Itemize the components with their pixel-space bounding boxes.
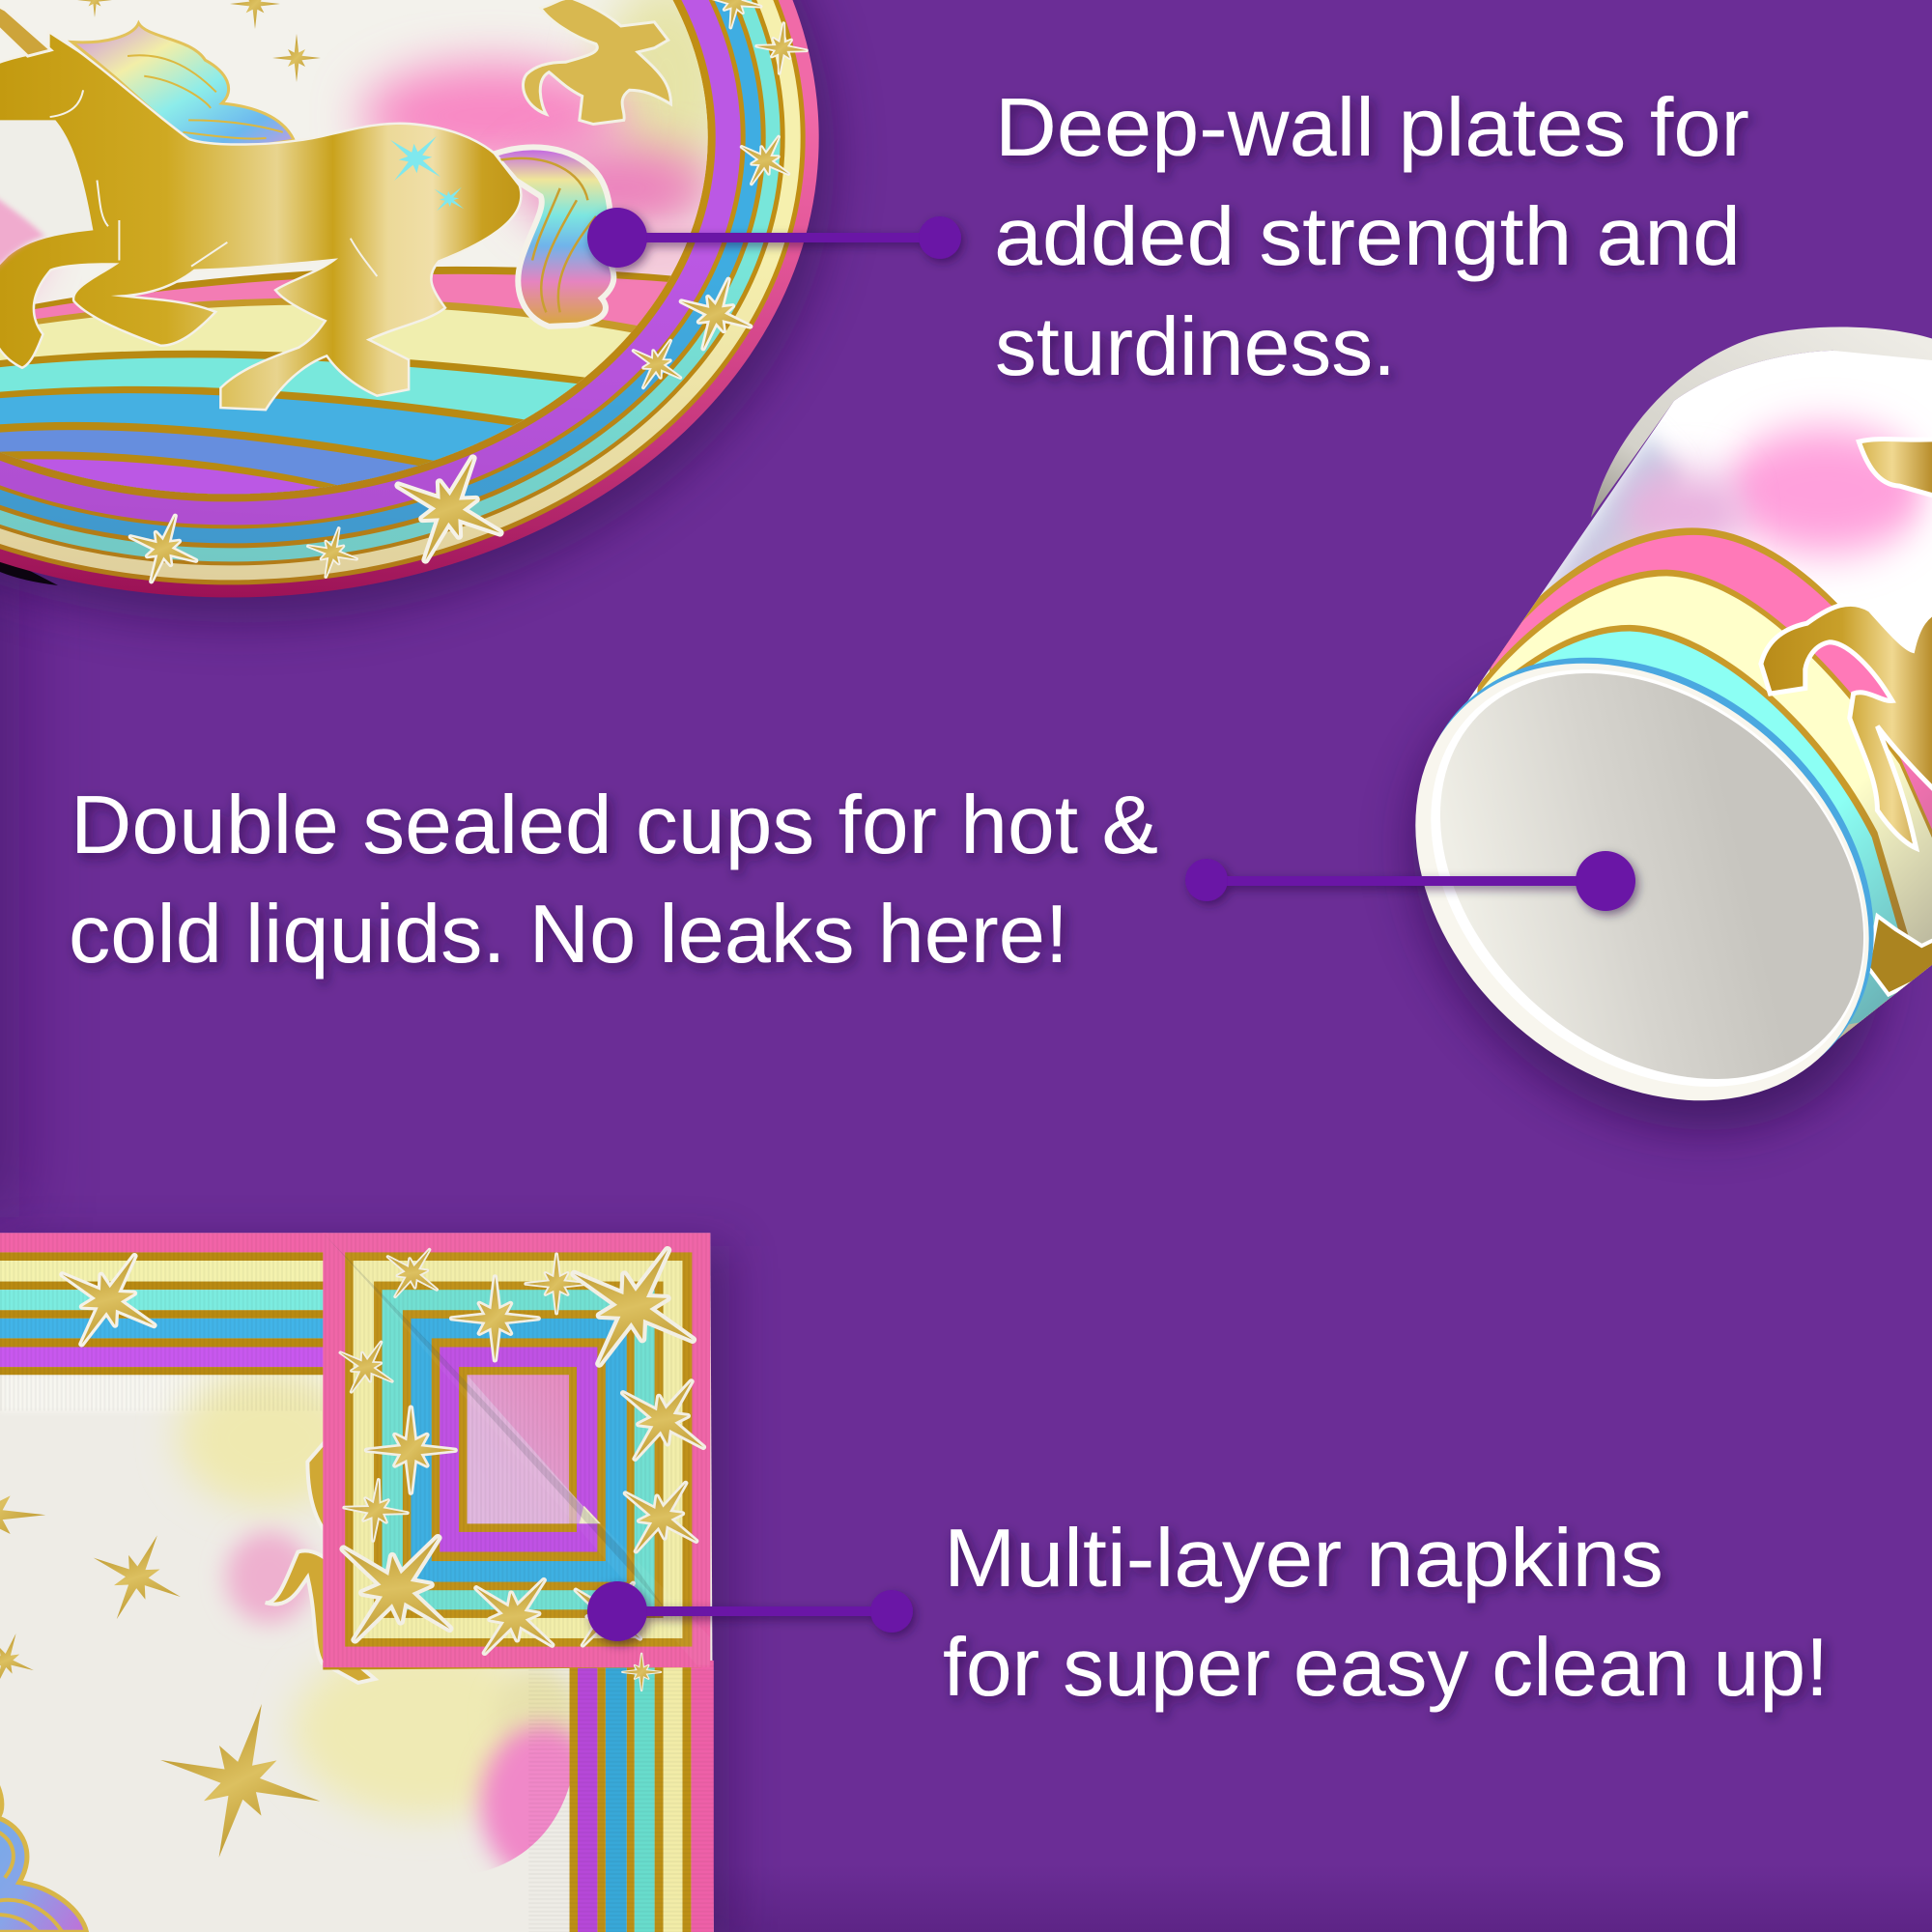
callout: napkins text: Multi-layer napkins [944, 1513, 1663, 1605]
pegasus [523, 0, 671, 125]
callout: plates text: Deep-wall plates for [995, 82, 1749, 174]
plate centre [0, 0, 708, 495]
callout: plates text: added strength and [994, 191, 1741, 283]
cup unicorn lower hoof [1868, 916, 1932, 995]
pegasus behind flap [266, 1434, 375, 1683]
unicorn detail lines [50, 90, 377, 276]
panel: napkin [0, 1217, 731, 1932]
callout: cups text: cold liquids. No leaks here! [69, 889, 1068, 980]
napkin plain stars [0, 1462, 342, 1878]
unicorn body [0, 34, 520, 409]
cyan sparkle large [369, 118, 462, 199]
plate inner arcs [0, 267, 670, 495]
cup unicorn legs [1761, 604, 1932, 848]
callout: cups text [69, 780, 1158, 980]
connector: plates [587, 208, 961, 268]
plate rainbow rim [0, 0, 819, 597]
napkin right bands [528, 1661, 714, 1932]
unicorn mane at corner [0, 1780, 87, 1932]
cup body [1467, 351, 1932, 1040]
napkin top-band star [36, 1231, 181, 1370]
unicorn tail [494, 147, 613, 327]
callout: cups text: Double sealed cups for hot & [71, 780, 1158, 871]
callout: napkins text [943, 1513, 1829, 1714]
flap fold diagonal [323, 1233, 666, 1609]
callout: napkins text: for super easy clean up! [943, 1622, 1829, 1714]
plate shadow [0, 0, 859, 653]
unicorn mane [72, 23, 294, 152]
cup rim [1591, 327, 1932, 518]
plate rim stars [119, 0, 809, 593]
napkin top bands [0, 1233, 327, 1411]
unicorn head gap [0, 120, 93, 276]
cup shadow [1322, 583, 1932, 1223]
cyan sparkle small [422, 177, 476, 221]
callout: plates text [994, 82, 1749, 393]
panel: cup [1322, 323, 1932, 1223]
napkin sheet [0, 1233, 714, 1932]
plate plain stars [77, 0, 321, 82]
cup unicorn top leg [1859, 439, 1932, 498]
connector: napkins [587, 1581, 913, 1641]
callout: plates text: sturdiness. [995, 301, 1396, 393]
panel: plate [0, 0, 859, 698]
plate edge sliver [0, 555, 58, 585]
napkin folded flap [323, 1233, 710, 1669]
connector: cups [1185, 851, 1635, 911]
cup base [1328, 567, 1932, 1190]
napkin blush [178, 1369, 606, 1883]
napkin flap stars [302, 1217, 731, 1690]
napkin shadow [0, 1246, 729, 1932]
unicorn horn [0, 4, 51, 56]
